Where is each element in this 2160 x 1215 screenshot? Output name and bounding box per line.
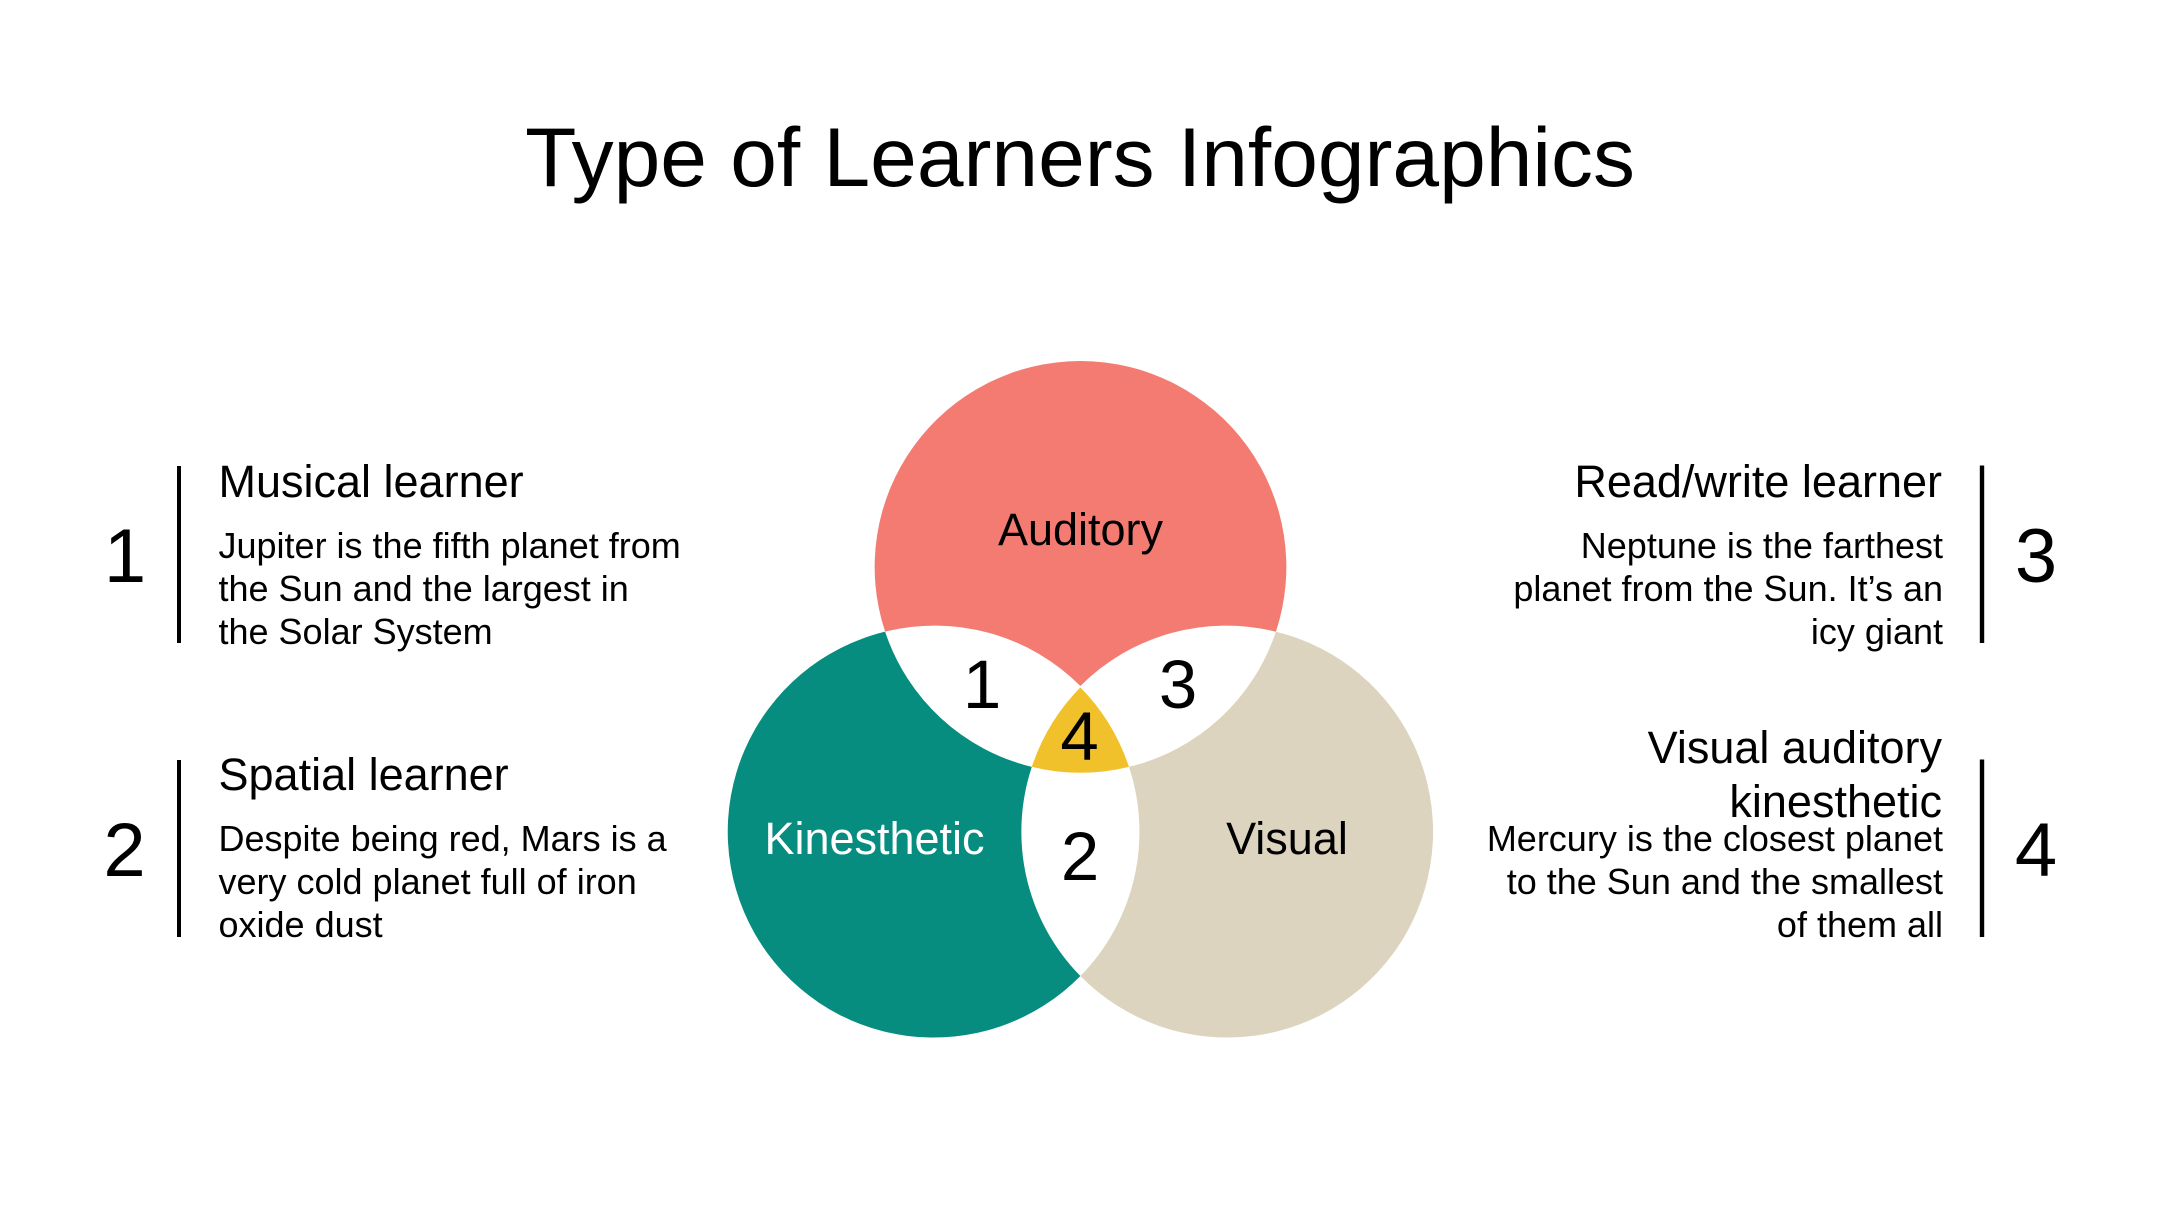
- divider bar 1: [177, 466, 181, 643]
- body text: visual auditory kinesthetic: Mercury is the closest planet: [1487, 818, 1943, 859]
- number 2: 2: [103, 808, 146, 893]
- label: visual: Visual: [1226, 813, 1348, 864]
- venn diagram: [728, 361, 1433, 1038]
- label: auditory: Auditory: [998, 504, 1164, 555]
- circle: auditory: [875, 361, 1286, 686]
- body text: spatial learner: very cold planet full of iron: [218, 861, 637, 902]
- title: Type of Learners Infographics: [525, 110, 1635, 204]
- number 3: 3: [2015, 514, 2057, 599]
- heading: visual auditory kinesthetic: kinesthetic: [1729, 776, 1942, 827]
- heading: musical learner: Musical learner: [218, 456, 524, 507]
- circle: kinesthetic: [728, 632, 1080, 1038]
- panel: spatial learner: [103, 749, 668, 945]
- divider bar 2: [177, 760, 181, 937]
- body text: musical learner: Jupiter is the fifth planet from: [218, 525, 681, 566]
- overlap number 2: 2: [1061, 818, 1099, 895]
- panel: read/write learner: [1513, 456, 2057, 652]
- panel: visual auditory kinesthetic: [1487, 722, 2057, 945]
- heading: spatial learner: Spatial learner: [218, 749, 509, 800]
- body text: musical learner: the Sun and the largest in: [218, 568, 629, 609]
- label: kinesthetic: Kinesthetic: [764, 813, 985, 864]
- body text: read/write learner: icy giant: [1811, 611, 1943, 652]
- body text: musical learner: the Solar System: [218, 611, 493, 652]
- heading: read/write learner: Read/write learner: [1574, 456, 1942, 507]
- divider bar 3: [1980, 466, 1984, 643]
- number 4: 4: [2015, 808, 2057, 893]
- heading: visual auditory kinesthetic: Visual auditory: [1648, 722, 1942, 773]
- body text: spatial learner: Despite being red, Mars is a: [218, 818, 668, 859]
- body text: visual auditory kinesthetic: of them all: [1777, 904, 1943, 945]
- center overlap: [1032, 687, 1129, 773]
- overlap number 1: 1: [963, 646, 1001, 723]
- body text: spatial learner: oxide dust: [218, 904, 383, 945]
- divider bar 4: [1980, 760, 1984, 937]
- body text: visual auditory kinesthetic: to the Sun and the smallest: [1507, 861, 1943, 902]
- body text: read/write learner: planet from the Sun. It’s an: [1513, 568, 1943, 609]
- number 1: 1: [104, 514, 146, 599]
- panel: musical learner: [104, 456, 681, 652]
- circle: visual: [1080, 632, 1433, 1038]
- overlap number 3: 3: [1159, 646, 1197, 723]
- body text: read/write learner: Neptune is the farthest: [1581, 525, 1943, 566]
- overlap number 4: 4: [1060, 698, 1099, 774]
